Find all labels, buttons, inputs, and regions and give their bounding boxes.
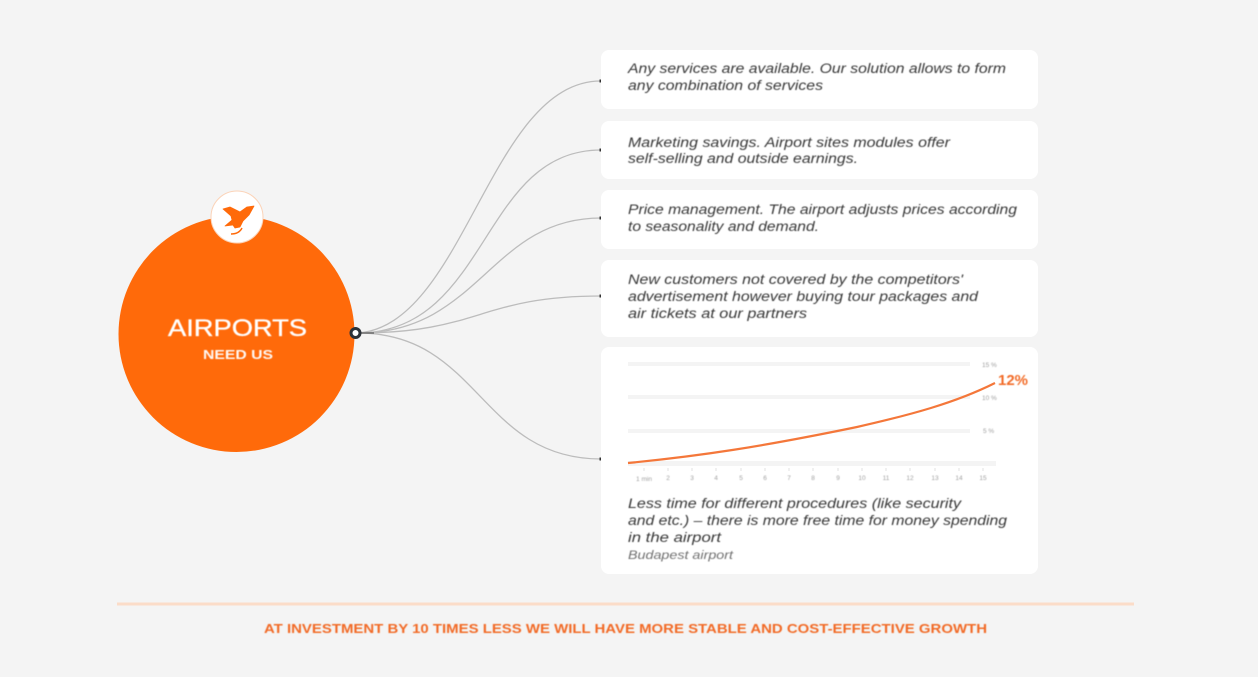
connector hub dot — [351, 328, 360, 338]
divider — [117, 602, 1134, 606]
line chart: 7 — [787, 475, 791, 482]
panel: new customers: advertisement however buying tour packages and — [628, 289, 979, 304]
line chart: 3 — [690, 475, 694, 482]
line chart: 5 % — [983, 428, 994, 435]
line chart: 14 — [955, 475, 963, 482]
source note: Budapest airport — [628, 550, 734, 562]
panel: any services: any combination of services — [628, 78, 823, 93]
line chart: 6 — [763, 475, 767, 482]
line chart: 13 — [931, 475, 939, 482]
chart description: and etc.) – there is more free time for money spending — [628, 513, 1008, 528]
icon: airplane badge — [211, 191, 263, 243]
panel: price management: to seasonality and demand. — [628, 219, 819, 234]
panel: marketing savings: Marketing savings. Airport sites modules offer — [628, 135, 951, 150]
conclusion text: AT INVESTMENT BY 10 TIMES LESS WE WILL HAVE MORE STABLE AND COST-EFFECTIVE GROWTH — [264, 622, 987, 636]
panel: new customers: air tickets at our partners — [628, 306, 807, 321]
line chart: 15 % — [982, 362, 997, 369]
line chart: 11 — [883, 475, 890, 482]
subheading: need us: NEED US — [203, 347, 273, 362]
panel: marketing savings: self-selling and outside earnings. — [628, 151, 858, 166]
growth curve — [628, 383, 995, 463]
line chart: 10 — [858, 475, 866, 482]
main circle: airports — [118, 216, 354, 452]
line chart — [628, 362, 1028, 483]
panel: new customers — [601, 260, 1038, 337]
panel: price management: Price management. The airport adjusts prices according — [628, 202, 1018, 217]
panel: any services — [601, 50, 1038, 109]
line chart: 2 — [666, 475, 670, 482]
line chart: 5 — [739, 475, 743, 482]
line chart: 12 — [906, 475, 914, 482]
connector lines from circle to cards — [358, 80, 602, 460]
panel: marketing savings — [601, 121, 1038, 179]
chart description — [628, 496, 1008, 545]
line chart: 4 — [714, 475, 718, 482]
panel: any services: Any services are available. Our solution allows to form — [627, 61, 1006, 76]
line chart: 1 min — [636, 476, 652, 483]
line chart: 15 — [979, 475, 987, 482]
chart description: Less time for different procedures (like security — [628, 496, 962, 511]
panel: price management — [601, 190, 1038, 249]
line chart: 9 — [836, 475, 840, 482]
line chart: 8 — [811, 475, 815, 482]
heading: airports: AIRPORTS — [168, 315, 307, 342]
value label: 12%: 12% — [998, 373, 1028, 389]
panel: new customers: New customers not covered by the competitors' — [628, 272, 963, 287]
line chart: 10 % — [982, 395, 997, 402]
chart description: in the airport — [628, 530, 723, 545]
panel: chart and procedures — [601, 347, 1038, 574]
